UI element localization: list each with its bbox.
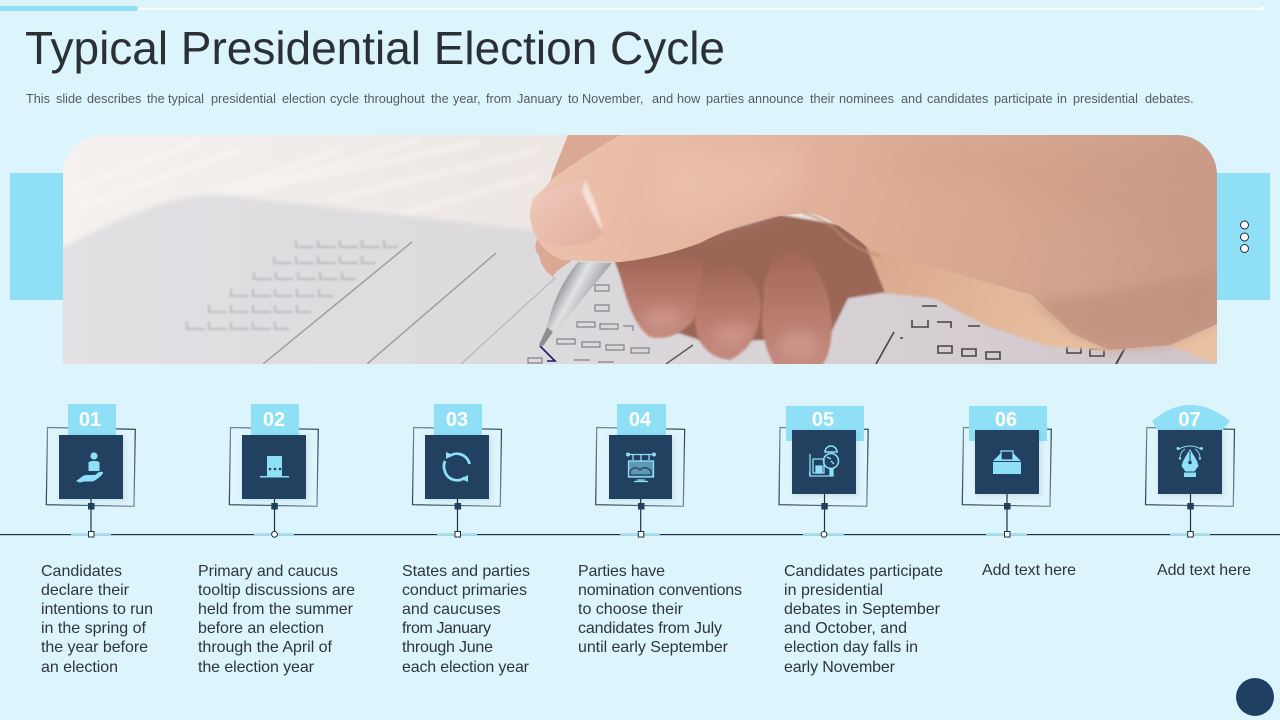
number 07: 07 xyxy=(1178,409,1201,431)
text: step 05: Candidates participate xyxy=(784,563,943,580)
icon: refresh cycle xyxy=(444,452,470,482)
tab 06 xyxy=(969,406,1047,441)
subtitle: the xyxy=(431,92,449,106)
subtitle: describes xyxy=(87,92,141,106)
connector 05 xyxy=(803,494,844,537)
tab 05 xyxy=(786,406,864,441)
text: step 03 xyxy=(402,563,530,676)
icon: design monitor xyxy=(627,453,655,482)
top progress bar xyxy=(0,6,1264,11)
corner page badge xyxy=(1236,678,1274,716)
subtitle: participate xyxy=(994,92,1053,106)
frame 01 xyxy=(46,428,135,506)
connector 04 xyxy=(620,499,660,537)
subtitle: slide xyxy=(56,92,82,106)
subtitle: in xyxy=(1057,92,1067,106)
subtitle: election xyxy=(282,92,326,106)
text: step 04: until early September xyxy=(578,639,729,656)
subtitle: their xyxy=(810,92,835,106)
icon box 05 xyxy=(792,430,856,494)
text: step 03: conduct primaries xyxy=(402,582,527,599)
photo: hand marking a ballot with a pen xyxy=(63,135,1217,364)
text: step 01: declare their xyxy=(41,582,130,599)
frame 07 xyxy=(1146,428,1234,506)
number 01: 01 xyxy=(79,409,101,431)
frame 05 xyxy=(779,428,868,506)
text: step 04: Parties have xyxy=(578,563,665,580)
subtitle: year, xyxy=(453,92,481,106)
text: step 07: Add text here xyxy=(1157,562,1251,579)
number 04: 04 xyxy=(629,409,652,431)
step 05 xyxy=(779,406,868,537)
subtitle: typical xyxy=(168,92,204,106)
icon box 02 xyxy=(242,435,306,499)
title: Typical Presidential Election Cycle xyxy=(25,22,725,74)
icon box 06 xyxy=(975,430,1039,494)
text: step 03: and caucuses xyxy=(402,601,501,618)
subtitle: throughout xyxy=(364,92,425,106)
icon box 03 xyxy=(425,435,489,499)
tab 03 xyxy=(434,404,482,438)
text: step 02: tooltip discussions are xyxy=(198,582,355,599)
text: step 05: and October, and xyxy=(784,620,907,637)
side of hand xyxy=(866,246,1217,364)
text: step 02: before an election xyxy=(198,620,324,637)
text: step 02: held from the summer xyxy=(198,601,354,618)
text: step 04: to choose their xyxy=(578,601,684,618)
icon: pen tool xyxy=(1176,446,1203,477)
text: step 03: each election year xyxy=(402,659,530,676)
subtitle: from xyxy=(486,92,511,106)
icon box 07 xyxy=(1158,430,1222,494)
subtitle: presidential xyxy=(211,92,276,106)
subtitle: November, xyxy=(582,92,643,106)
connector 01 xyxy=(71,499,111,537)
left accent block xyxy=(10,173,63,300)
text: step 01: in the spring of xyxy=(41,620,147,637)
subtitle: announce xyxy=(748,92,804,106)
connector 02 xyxy=(254,499,294,537)
step 01 xyxy=(46,404,135,537)
subtitle: debates. xyxy=(1145,92,1194,106)
palm and thumb xyxy=(530,135,1217,350)
text: step 01: intentions to run xyxy=(41,601,153,618)
subtitle: how xyxy=(677,92,701,106)
subtitle: This xyxy=(26,92,50,106)
subtitle: nominees xyxy=(839,92,894,106)
back and lower index finger xyxy=(535,135,620,279)
icon: plans and clock xyxy=(810,446,838,476)
thumbnail xyxy=(532,180,603,246)
text: step 01: Candidates xyxy=(41,563,122,580)
text: step 05: election day falls in xyxy=(784,639,918,656)
subtitle: parties xyxy=(706,92,744,106)
icon: ballot top hat xyxy=(260,456,289,478)
tab 07 arc xyxy=(1152,405,1230,431)
text: step 03: States and parties xyxy=(402,563,530,580)
text: step 05 xyxy=(784,563,943,676)
subtitle: and xyxy=(652,92,673,106)
number 05: 05 xyxy=(812,409,834,431)
text: step 03: through June xyxy=(402,639,493,656)
number 02: 02 xyxy=(263,409,285,431)
tab 02 xyxy=(251,404,299,438)
frame 02 xyxy=(229,428,318,506)
step 07 xyxy=(1146,405,1234,537)
step 02 xyxy=(229,404,318,537)
text: step 05: early November xyxy=(784,659,896,676)
shaded area behind fingers xyxy=(615,215,886,340)
subtitle: presidential xyxy=(1073,92,1138,106)
subtitle: and xyxy=(901,92,922,106)
tab 04 xyxy=(617,404,666,438)
text: step 02 xyxy=(198,563,355,676)
fingers xyxy=(617,258,704,338)
number 06: 06 xyxy=(995,409,1017,431)
right accent block with dots xyxy=(1217,173,1270,300)
text: step 02: Primary and caucus xyxy=(198,563,338,580)
number 03: 03 xyxy=(446,409,468,431)
text: step 01: an election xyxy=(41,659,118,676)
frame 03 xyxy=(412,428,502,506)
baseline xyxy=(0,534,1280,535)
icon box 04 xyxy=(609,435,672,499)
step 04 xyxy=(596,404,685,537)
connector 06 xyxy=(986,494,1027,537)
icon: person on hand xyxy=(76,452,103,482)
step 03 xyxy=(412,404,502,537)
text: step 01: the year before xyxy=(41,639,148,656)
icon box 01 xyxy=(59,435,123,499)
subtitle: cycle xyxy=(330,92,359,106)
frame 04 xyxy=(596,428,685,506)
subtitle: candidates xyxy=(927,92,988,106)
step 06 xyxy=(962,406,1051,537)
connector 07 xyxy=(1170,494,1210,537)
subtitle: to xyxy=(568,92,579,106)
frame 06 xyxy=(962,428,1051,506)
subtitle: January xyxy=(517,92,563,106)
text: step 03: from January xyxy=(402,620,491,637)
text: step 05: in presidential xyxy=(784,582,883,599)
icon: ballot box xyxy=(993,451,1021,474)
text: step 06: Add text here xyxy=(982,562,1076,579)
text: step 02: the election year xyxy=(198,659,315,676)
subtitle: the xyxy=(147,92,165,106)
pen body xyxy=(547,262,612,330)
text: step 04: nomination conventions xyxy=(578,582,742,599)
text: step 05: debates in September xyxy=(784,601,941,618)
connector 03 xyxy=(437,499,477,537)
text: step 02: through the April of xyxy=(198,639,333,656)
text: step 01 xyxy=(41,563,153,676)
text: step 04: candidates from July xyxy=(578,620,722,637)
text: step 04 xyxy=(578,563,742,656)
pen mark xyxy=(540,346,555,361)
tab 01 xyxy=(68,404,116,438)
